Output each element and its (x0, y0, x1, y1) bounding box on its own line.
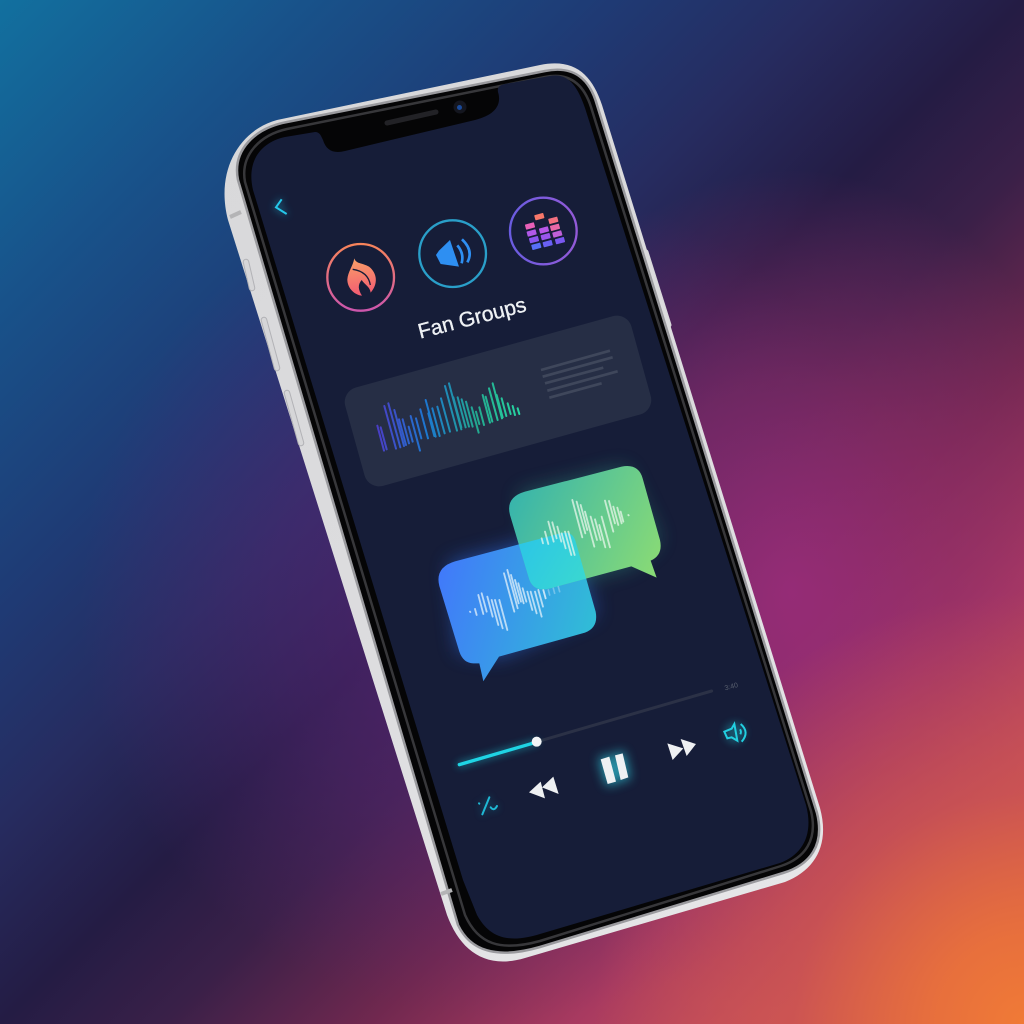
icon: equalizer ring (510, 198, 577, 264)
repeat icon (479, 797, 497, 814)
pause button (601, 753, 628, 784)
heading: Fan Groups: Fan Groups (416, 293, 529, 344)
duration label: 3:40 (724, 682, 739, 692)
icon: speaker ring (419, 220, 486, 287)
overlap region (519, 532, 586, 590)
green bubble (509, 466, 661, 589)
screen (251, 76, 808, 939)
progress knob (532, 737, 542, 747)
bezel highlight (244, 76, 813, 946)
blue bubble (438, 533, 596, 681)
waveform chart (377, 383, 519, 451)
text placeholder lines (541, 351, 618, 398)
blue bubble waveform (470, 570, 546, 630)
panel: waveform card (341, 312, 655, 490)
progress fill glow (459, 742, 536, 765)
black bezel (237, 70, 819, 953)
green bubble waveform (542, 500, 629, 555)
volume icon (724, 722, 746, 743)
playback controls (459, 682, 746, 814)
faint waveform in overlap (543, 587, 560, 598)
outer frame (225, 63, 823, 961)
icon: flame ring (327, 244, 394, 311)
chat bubbles (438, 466, 661, 681)
left side buttons (246, 262, 301, 443)
progress track (541, 691, 712, 741)
antenna bands (230, 212, 452, 894)
progress fill (459, 742, 536, 765)
right side button (646, 252, 669, 325)
phone body (225, 63, 823, 961)
camera (454, 100, 466, 114)
rewind button (529, 777, 559, 798)
bubble glow (449, 467, 660, 657)
speaker grill (387, 112, 436, 123)
fast forward button (667, 739, 696, 760)
back chevron icon (276, 199, 287, 214)
phone illustration (224, 63, 824, 962)
